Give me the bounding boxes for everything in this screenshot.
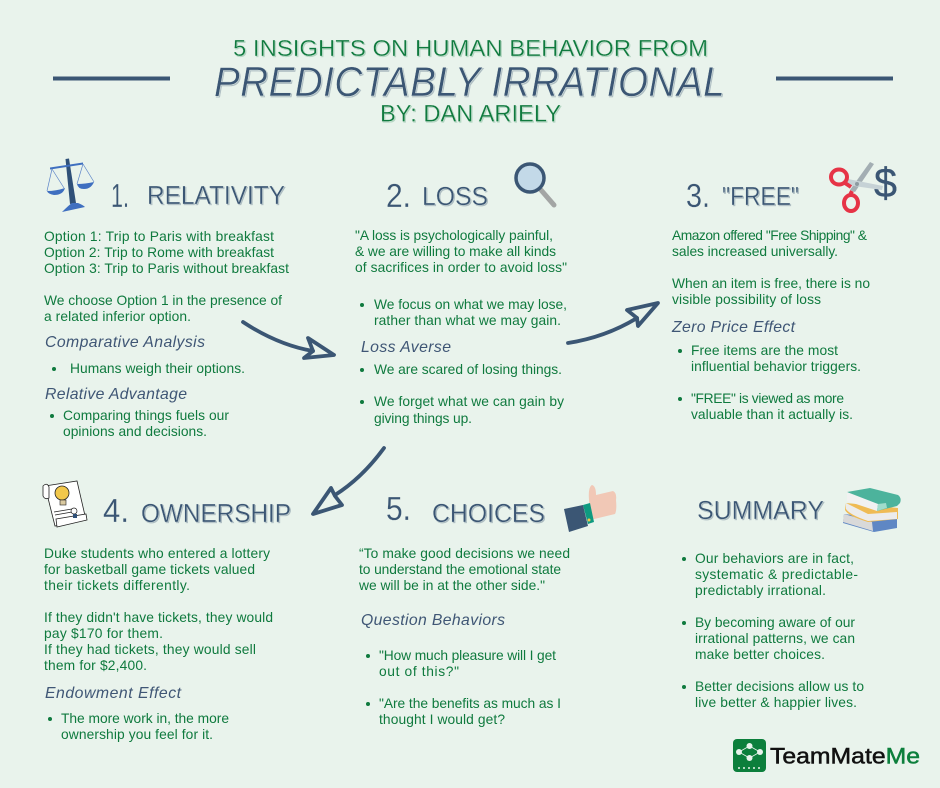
text: duke students: [44, 546, 273, 673]
logo wordmark: TeamMate Me: [770, 744, 920, 768]
text: free shipping: Amazon offered "Free Shipping" &: [672, 228, 867, 243]
text: duke students: them for $2,400.: [44, 658, 147, 673]
bullet: free value: [678, 391, 853, 422]
heading: 2. loss: [386, 177, 488, 214]
bullet: more work: ownership you feel for it.: [61, 727, 213, 742]
quote: choices: [358, 546, 570, 593]
bullet: free value: valuable than it actually is.: [691, 407, 853, 422]
panel: relativity: [44, 158, 289, 439]
icon: diploma with light bulb: [43, 481, 87, 527]
icon: scissors and dollar: [831, 159, 897, 211]
text: options: Option 1: Trip to Paris with breakfast: [44, 229, 274, 244]
icon: balance scale: [47, 158, 94, 212]
subheading: question behaviors: Question Behaviors: [361, 612, 505, 629]
bullet: awareness: [682, 615, 855, 662]
bullet: benefits: thought I would get?: [379, 712, 505, 727]
text: free shipping: sales increased universally.: [672, 244, 838, 259]
text: duke students: their tickets differently.: [44, 578, 190, 593]
bullet: pleasure: out of this?": [379, 664, 459, 679]
bullet: humans weigh: Humans weigh their options.: [70, 361, 245, 376]
heading: 5. choices: 5.: [386, 490, 411, 527]
panel: choices: [358, 485, 616, 727]
quote: loss: of sacrifices in order to avoid loss": [355, 260, 567, 275]
subheading: zero price effect: Zero Price Effect: [671, 319, 796, 336]
text: duke students: If they had tickets, they would sell: [44, 642, 256, 657]
bullet: comparing things: [50, 408, 229, 439]
title block: [214, 35, 725, 128]
bullet: focus: We focus on what we may lose,: [374, 297, 567, 312]
main title: PREDICTABLY IRRATIONAL: [214, 60, 725, 105]
text: duke students: If they didn't have tickets, they would: [44, 610, 273, 625]
arrow: loss to ownership: [313, 448, 384, 514]
bullet: benefits: [366, 696, 561, 727]
text: duke students: for basketball game tickets valued: [44, 562, 255, 577]
bullet: behaviors: Our behaviors are in fact,: [695, 551, 854, 566]
bullet: awareness: irrational patterns, we can: [695, 631, 855, 646]
subheading: endowment effect: Endowment Effect: [45, 685, 182, 702]
text: free shipping: [672, 228, 870, 307]
heading: 1. relativity: RELATIVITY: [147, 180, 285, 210]
heading: 1. relativity: [111, 177, 285, 214]
text: options: Option 2: Trip to Rome with breakfast: [44, 245, 274, 260]
bullet: focus: rather than what we may gain.: [374, 313, 561, 328]
icon: logo mark: [733, 739, 766, 772]
bullet: pleasure: [366, 648, 556, 679]
title line one: 5 INSIGHTS ON HUMAN BEHAVIOR FROM: [233, 35, 708, 61]
bullet: behaviors: [682, 551, 858, 598]
bullet: forget: We forget what we can gain by: [374, 394, 564, 409]
quote: loss: [355, 228, 567, 275]
bullet: free value: "FREE" is viewed as more: [691, 391, 844, 406]
bullet: focus: [360, 297, 567, 328]
bullet: comparing things: Comparing things fuels our: [63, 408, 229, 423]
arrow: loss to free: [568, 303, 658, 343]
bullet: free items: influential behavior triggers.: [691, 359, 861, 374]
icon: magnifying glass: [516, 164, 554, 205]
quote: loss: "A loss is psychologically painful,: [355, 228, 553, 243]
quote: choices: “To make good decisions we need: [359, 546, 570, 561]
text: options: [44, 229, 289, 324]
heading: 4. ownership: OWNERSHIP: [141, 498, 291, 528]
icon: thumbs up: [564, 485, 616, 532]
bullet: better decisions: [682, 679, 864, 710]
bullet: behaviors: systematic & predictable-: [695, 567, 858, 582]
bullet: comparing things: opinions and decisions.: [63, 424, 207, 439]
bullet: free items: Free items are the most: [691, 343, 838, 358]
panel: free: [671, 159, 897, 422]
text: options: Option 3: Trip to Paris without breakfast: [44, 261, 289, 276]
bullet: better decisions: Better decisions allow us to: [695, 679, 864, 694]
bullet: better decisions: live better & happier lives.: [695, 695, 857, 710]
subheading: comparative analysis: Comparative Analysis: [45, 334, 205, 351]
bullet: pleasure: "How much pleasure will I get: [379, 648, 556, 663]
bullet: behaviors: predictably irrational.: [695, 583, 826, 598]
heading: summary: SUMMARY: [697, 495, 824, 525]
bullet: scared: We are scared of losing things.: [374, 362, 562, 377]
heading: 5. choices: CHOICES: [432, 498, 545, 528]
bullet: benefits: "Are the benefits as much as I: [379, 696, 561, 711]
heading: 3. free: "FREE": [722, 181, 799, 211]
quote: choices: to understand the emotional state: [359, 562, 561, 577]
bullet: awareness: By becoming aware of our: [695, 615, 855, 630]
bullet: more work: [48, 711, 229, 742]
heading: 2. loss: 2.: [386, 177, 411, 214]
icon: scissors and dollar: $: [874, 159, 897, 206]
heading: 4. ownership: 4.: [103, 492, 129, 529]
text: options: We choose Option 1 in the presence of: [44, 293, 282, 308]
text: duke students: pay $170 for them.: [44, 626, 163, 641]
heading: 3. free: [686, 177, 799, 214]
subheading: relative advantage: Relative Advantage: [45, 386, 187, 403]
logo: TeamMateMe: [733, 739, 920, 772]
heading: 2. loss: LOSS: [422, 181, 488, 211]
bullet: free items: [678, 343, 861, 374]
arrow: relativity to loss: [243, 322, 334, 358]
subheading: loss averse: Loss Averse: [361, 339, 451, 356]
bullet: forget: [360, 394, 564, 426]
icon: stack of books: [843, 488, 901, 532]
bullet: awareness: make better choices.: [695, 647, 825, 662]
panel: loss: [355, 164, 567, 426]
text: free shipping: visible possibility of loss: [672, 292, 821, 307]
panel: summary: [682, 488, 901, 710]
heading: 4. ownership: [103, 492, 291, 529]
heading: 1. relativity: 1.: [111, 177, 129, 214]
text: duke students: Duke students who entered a lottery: [44, 546, 270, 561]
panel: ownership: [43, 481, 291, 742]
bullet: forget: giving things up.: [374, 411, 472, 426]
quote: choices: we will be in at the other side.": [358, 578, 545, 593]
text: options: a related inferior option.: [44, 309, 191, 324]
heading: 5. choices: [386, 490, 545, 528]
heading: 3. free: 3.: [686, 177, 710, 214]
bullet: more work: The more work in, the more: [61, 711, 229, 726]
quote: loss: & we are willing to make all kinds: [355, 244, 556, 259]
author line: BY: DAN ARIELY: [380, 100, 561, 128]
text: free shipping: When an item is free, there is no: [672, 276, 870, 291]
